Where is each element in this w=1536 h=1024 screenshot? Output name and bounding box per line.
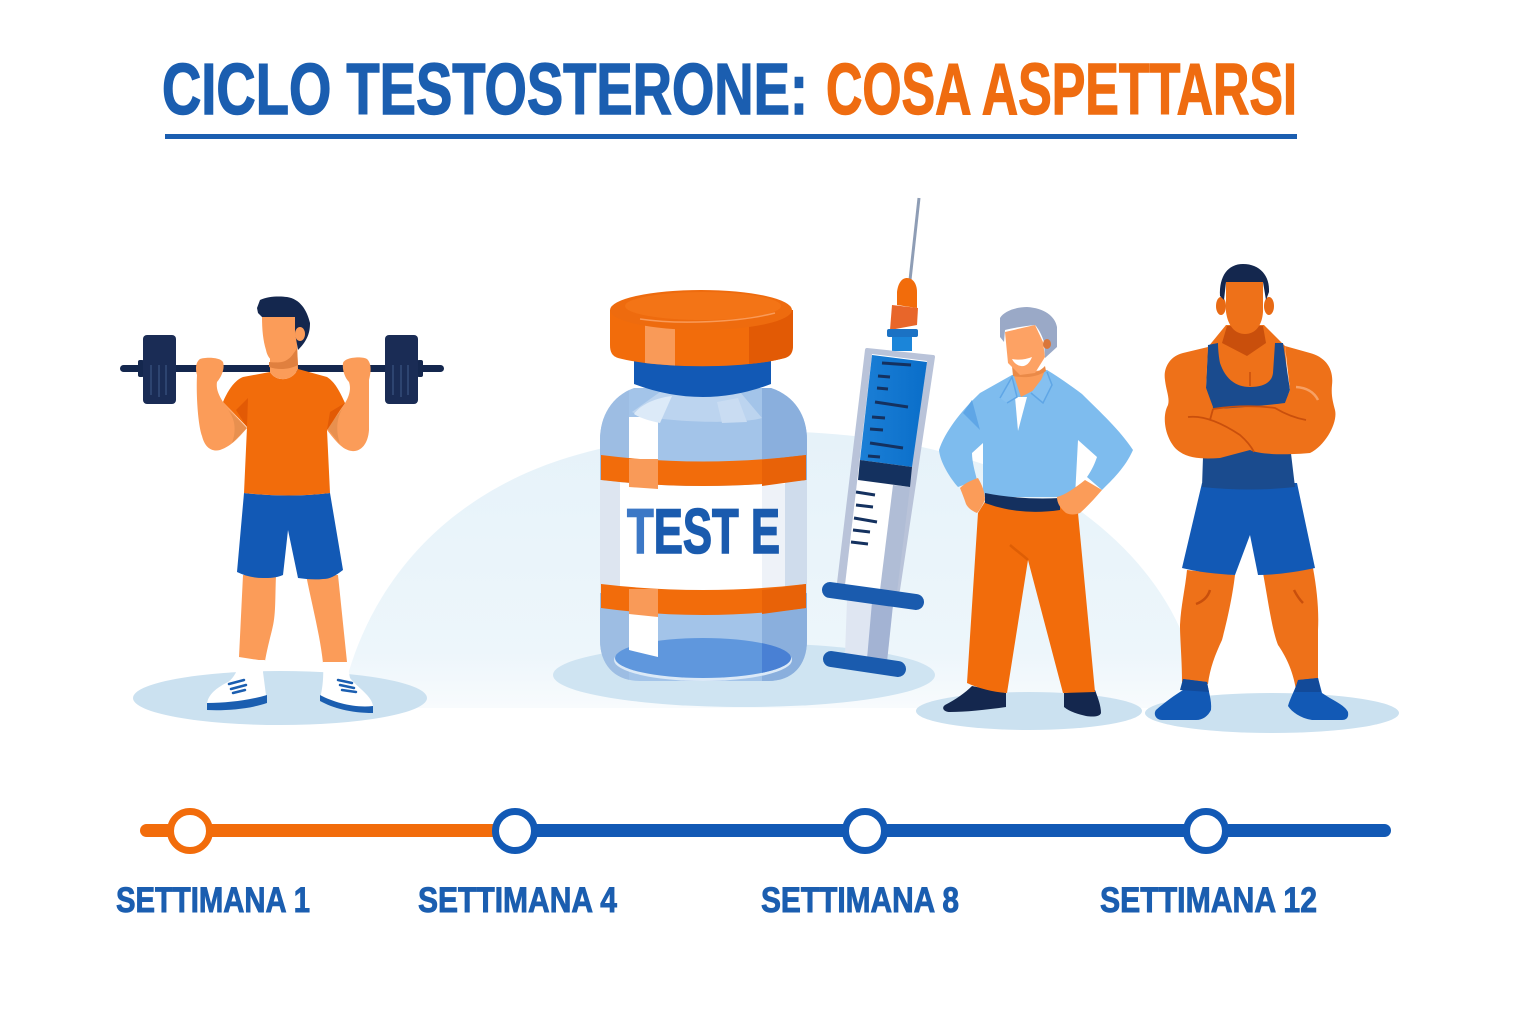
figure: muscular man arms crossed	[1155, 264, 1348, 720]
timeline	[116, 812, 1391, 920]
vial neck	[634, 360, 771, 397]
shirt	[223, 369, 345, 496]
collar	[1000, 372, 1052, 403]
marker: week 1	[170, 812, 210, 850]
syringe plunger head	[858, 460, 912, 487]
neck and head	[257, 296, 310, 379]
ground shadow: second figure	[916, 692, 1142, 730]
syringe thumb rest	[831, 659, 898, 669]
ground shadow: vial	[553, 643, 935, 707]
tank top	[1202, 343, 1295, 490]
vial TEST E	[598, 290, 812, 690]
label: week 1: SETTIMANA 1	[116, 881, 310, 920]
legs	[1180, 568, 1318, 690]
shorts	[237, 493, 343, 579]
needle	[910, 198, 919, 280]
shoes	[1155, 678, 1348, 720]
vial body	[598, 380, 812, 690]
vial cap	[610, 290, 793, 372]
syringe flange	[830, 590, 916, 602]
vial label text: TEST E	[627, 497, 780, 567]
trouser crease	[1010, 545, 1028, 560]
title: blue part: CICLO TESTOSTERONE:	[162, 50, 808, 130]
syringe tick marks	[851, 363, 911, 544]
sneakers	[207, 660, 373, 713]
arms	[196, 357, 371, 451]
legs	[239, 575, 347, 663]
background hill	[340, 432, 1190, 708]
head and neck	[1000, 307, 1057, 431]
infographic canvas	[116, 62, 1399, 913]
barbell	[120, 335, 444, 404]
marker: week 12	[1186, 812, 1226, 850]
syringe hub	[887, 278, 918, 351]
shirt	[939, 370, 1133, 497]
trousers	[967, 500, 1095, 693]
vial orange bands	[601, 455, 806, 617]
chest line	[1249, 372, 1251, 386]
figure: older man smiling	[939, 307, 1133, 717]
crossed arms	[1165, 346, 1335, 458]
label: week 8: SETTIMANA 8	[761, 881, 959, 920]
title: orange part: COSA ASPETTARSI	[826, 50, 1297, 130]
title	[162, 50, 1297, 139]
figure: man lifting barbell	[120, 296, 444, 713]
timeline track blue	[490, 824, 1391, 837]
shorts	[1182, 483, 1315, 575]
syringe barrel	[839, 350, 933, 590]
torso skin	[1205, 325, 1290, 410]
ground shadow: third figure	[1145, 693, 1399, 733]
head	[1216, 264, 1274, 334]
label: week 12: SETTIMANA 12	[1100, 881, 1317, 920]
marker: week 4	[496, 812, 534, 850]
syringe liquid	[860, 355, 927, 467]
hands	[960, 478, 1102, 514]
shoes	[943, 686, 1101, 717]
arm shading	[963, 400, 980, 430]
ground shadow: first figure	[133, 671, 427, 725]
knee lines	[1196, 590, 1303, 604]
timeline track orange	[140, 824, 500, 837]
belt	[985, 493, 1060, 512]
syringe plunger rod	[845, 600, 893, 662]
title underline	[165, 134, 1297, 139]
syringe	[830, 198, 933, 669]
marker: week 8	[846, 812, 884, 850]
label: week 4: SETTIMANA 4	[418, 881, 617, 920]
neck	[1222, 326, 1266, 356]
sleeve shading	[236, 398, 345, 430]
